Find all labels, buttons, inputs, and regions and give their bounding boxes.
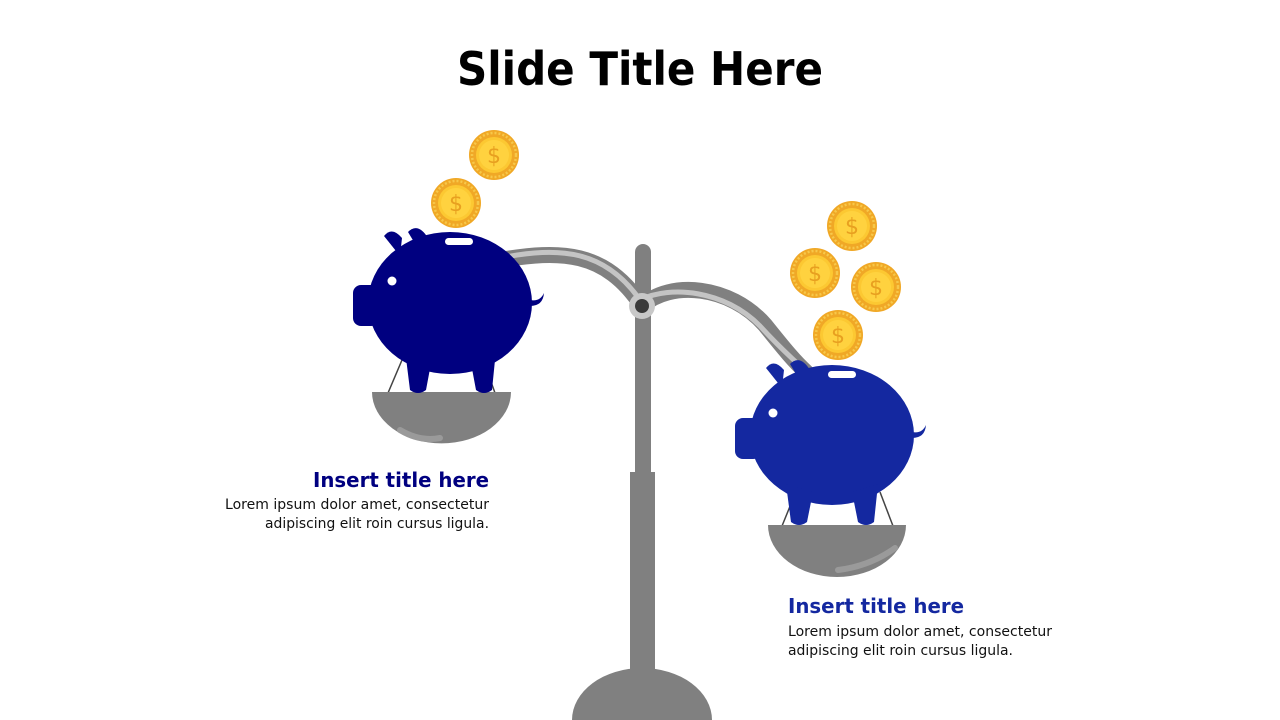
right pan <box>768 492 906 577</box>
left text block <box>225 468 489 532</box>
right text block <box>788 594 1052 659</box>
right text block: adipiscing elit roin cursus ligula. <box>788 643 1013 659</box>
left text block: adipiscing elit roin cursus ligula. <box>265 516 489 532</box>
right text block: Lorem ipsum dolor amet, consectetur <box>788 624 1052 640</box>
title: Slide Title Here <box>457 42 823 96</box>
pivot <box>629 293 655 319</box>
left piggy bank <box>353 228 544 393</box>
left text block: Insert title here <box>313 468 489 492</box>
left coins <box>431 130 519 228</box>
right coins <box>790 201 901 360</box>
right piggy bank <box>735 360 926 525</box>
scale beam <box>500 252 806 372</box>
scale stand <box>572 244 712 720</box>
left pan <box>372 360 511 443</box>
left text block: Lorem ipsum dolor amet, consectetur <box>225 497 489 513</box>
right text block: Insert title here <box>788 594 964 618</box>
